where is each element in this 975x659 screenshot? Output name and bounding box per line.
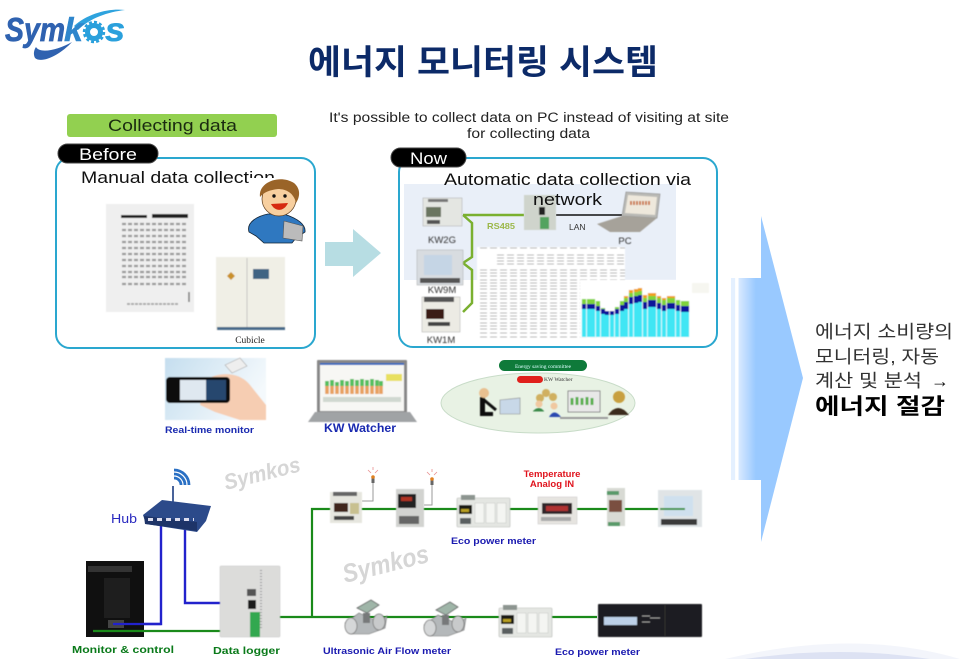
device: temperature display xyxy=(538,497,577,524)
label: real-time monitor: Real-time monitor xyxy=(165,425,254,436)
label: monitor and control: Monitor & control xyxy=(72,644,174,656)
text: energy saving conclusion: 계산 및 분석 xyxy=(815,371,922,391)
device: power meter 1 xyxy=(330,492,362,523)
logo: Symkos xyxy=(5,10,125,60)
label: KW Watcher: KW Watcher xyxy=(324,423,397,435)
device: KW2G xyxy=(423,198,462,246)
label: eco power meter: Eco power meter xyxy=(451,536,536,547)
label: before pill: Before xyxy=(79,145,137,164)
device: KW1M: KW1M xyxy=(427,335,455,346)
arrow: before to now xyxy=(325,229,381,277)
label: eco power meter lower: Eco power meter xyxy=(555,647,640,658)
label: now pill: Now xyxy=(410,149,448,168)
logo: Symkos: k xyxy=(64,11,85,48)
icon: paper form xyxy=(106,204,194,312)
network wiring: blue LAN xyxy=(113,523,250,624)
text: energy saving conclusion: 에너지 절감 xyxy=(815,394,945,419)
device: din module xyxy=(607,488,625,526)
icon: worker xyxy=(249,178,306,246)
description text xyxy=(329,110,729,141)
text: energy saving conclusion: 모니터링, 자동 xyxy=(815,347,939,367)
device: ultrasonic flow meter 2 xyxy=(424,602,466,636)
icon: cubicle cabinet xyxy=(216,257,285,330)
label: LAN: LAN xyxy=(569,222,586,232)
heading: Collecting data: Collecting data xyxy=(108,116,238,135)
device: KW9M: KW9M xyxy=(428,285,456,296)
device: multi meter xyxy=(658,490,702,527)
diagram background xyxy=(404,184,676,280)
network wiring: green bus xyxy=(93,509,685,631)
device: eco power meter lower xyxy=(499,605,552,637)
label: before pill xyxy=(58,144,158,164)
logo: Symkos: s xyxy=(105,11,125,48)
description text: It's possible to collect data on PC instead of visiting at site xyxy=(329,110,729,125)
logo: Symkos: Sym xyxy=(5,11,65,48)
label: RS485: RS485 xyxy=(487,221,515,231)
image: energy saving committee: KW Watcher xyxy=(544,377,573,383)
label: hub: Hub xyxy=(111,511,137,526)
text: automatic data collection xyxy=(444,170,692,209)
panel: now xyxy=(391,148,717,347)
panel: before xyxy=(56,144,315,348)
device: PC laptop xyxy=(597,192,660,247)
device: data logger xyxy=(220,566,280,637)
device: KW2G: KW2G xyxy=(428,235,456,246)
device: black controller xyxy=(598,604,702,637)
bottom right background arc xyxy=(725,644,960,659)
text: automatic data collection: network xyxy=(533,190,603,209)
heading: Collecting data xyxy=(67,114,277,137)
label: temperature analog in xyxy=(524,469,580,490)
device: KW9M xyxy=(417,250,463,296)
label: temperature analog in: Analog IN xyxy=(530,479,574,490)
device: PC laptop: PC xyxy=(618,236,632,247)
watermark: Symkos: Symkos xyxy=(221,452,303,495)
label: data logger: Data logger xyxy=(213,645,280,657)
green RS485 wiring xyxy=(463,215,524,312)
label: ultrasonic air flow meter: Ultrasonic Air Flow meter xyxy=(323,646,451,657)
image: energy saving committee xyxy=(441,360,635,433)
text: energy saving conclusion: 에너지 소비량의 xyxy=(815,322,953,342)
text: automatic data collection: Automatic data collection via xyxy=(444,170,692,189)
icon: gear xyxy=(84,22,104,42)
stacked bar chart xyxy=(580,280,710,338)
text: cubicle: Cubicle xyxy=(235,336,265,346)
heading pill xyxy=(499,360,587,371)
device: ultrasonic flow meter 1 xyxy=(345,600,387,634)
label: now pill xyxy=(391,148,466,168)
label: temperature analog in: Temperature xyxy=(524,469,580,480)
text: energy saving conclusion xyxy=(815,322,953,419)
device: data logger xyxy=(524,195,556,230)
description text: for collecting data xyxy=(467,126,591,141)
data table xyxy=(477,247,625,338)
title: 에너지 모니터링 시스템 xyxy=(308,44,658,82)
device: KW1M xyxy=(422,297,460,346)
image: real-time monitor phone xyxy=(165,358,266,420)
device: monitor and control PLC xyxy=(86,561,161,637)
text: energy saving conclusion: → xyxy=(931,371,949,391)
device: eco power meter xyxy=(457,495,510,527)
image: KW Watcher laptop xyxy=(308,360,417,422)
big arrow xyxy=(731,216,803,542)
LAN cable xyxy=(556,214,622,216)
watermark: Symkos lower: Symkos xyxy=(339,538,432,589)
device row: alarm lights xyxy=(362,467,437,505)
icon: hub with wifi xyxy=(143,470,211,532)
text: manual data collection: Manual data collection xyxy=(81,168,275,187)
device: temperature controller xyxy=(396,489,424,527)
heading pill: Energy saving committee xyxy=(515,364,572,370)
